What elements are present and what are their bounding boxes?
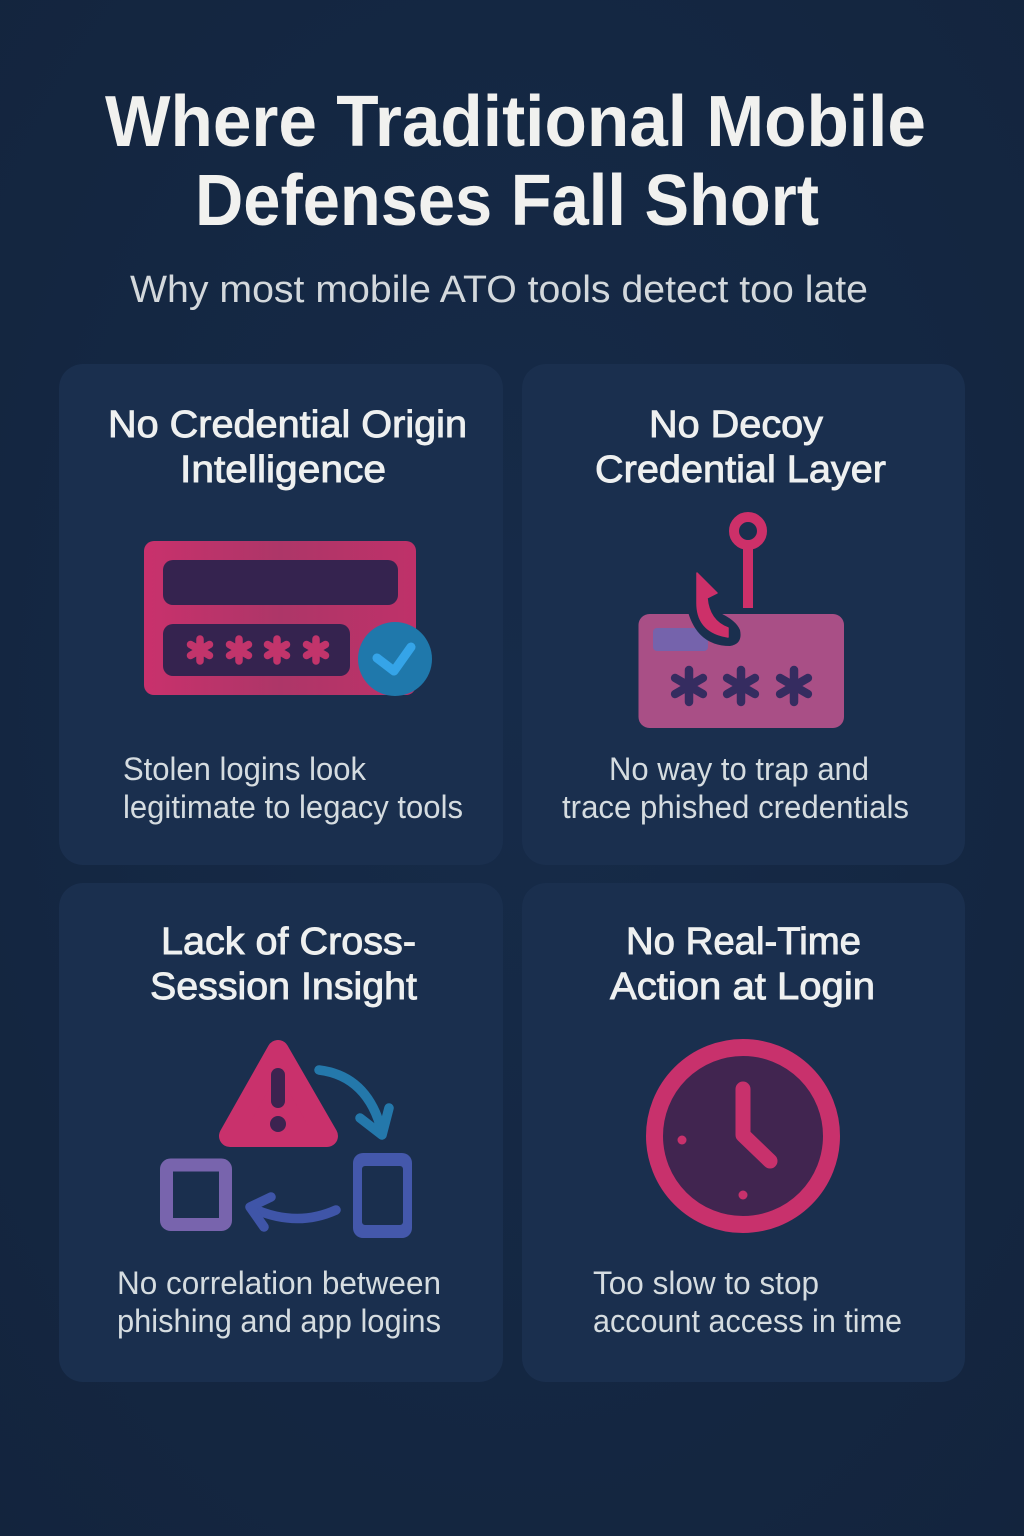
title — [105, 82, 926, 241]
heading: no real-time action at login — [610, 921, 875, 1008]
text: stolen logins — [123, 751, 463, 825]
text: no correlation: phishing and app logins — [117, 1303, 441, 1339]
heading: no credential origin intelligence: No Credential Origin — [108, 404, 467, 446]
panel: no decoy credential layer — [522, 364, 965, 865]
panel: no real-time action at login — [522, 883, 965, 1382]
text: no correlation: No correlation between — [117, 1265, 441, 1301]
heading: no credential origin intelligence: Intelligence — [180, 449, 386, 491]
panel: no credential origin intelligence — [59, 364, 503, 865]
icon: fish hook on credential card — [638, 517, 844, 728]
heading: no decoy credential layer — [595, 404, 886, 491]
icon: alert cycle between devices — [166, 1051, 412, 1238]
text: no correlation — [117, 1265, 441, 1339]
text: no way to trap: No way to trap and — [609, 751, 869, 787]
heading: lack of cross-session insight: Lack of Cross- — [161, 921, 416, 963]
text: stolen logins: Stolen logins look — [123, 751, 367, 787]
title: Defenses Fall Short — [195, 161, 819, 241]
text: too slow: account access in time — [593, 1303, 902, 1339]
text: no way to trap — [562, 751, 909, 825]
heading: no real-time action at login: Action at Login — [610, 966, 875, 1008]
title: Where Traditional Mobile — [105, 82, 926, 162]
subtitle: Why most mobile ATO tools detect too late — [130, 269, 868, 311]
text: too slow: Too slow to stop — [593, 1265, 819, 1301]
text: too slow — [593, 1265, 902, 1339]
panel: lack of cross-session insight — [59, 883, 503, 1382]
icon: clock — [654, 1048, 832, 1224]
icon: login card with check badge — [144, 541, 432, 696]
heading: lack of cross-session insight: Session Insight — [150, 966, 417, 1008]
heading: lack of cross-session insight — [150, 921, 417, 1008]
heading: no decoy credential layer: No Decoy — [649, 404, 823, 446]
heading: no decoy credential layer: Credential Layer — [595, 449, 886, 491]
heading: no credential origin intelligence — [108, 404, 467, 491]
heading: no real-time action at login: No Real-Time — [626, 921, 861, 963]
text: stolen logins: legitimate to legacy tools — [123, 789, 463, 825]
text: no way to trap: trace phished credentials — [562, 789, 909, 825]
